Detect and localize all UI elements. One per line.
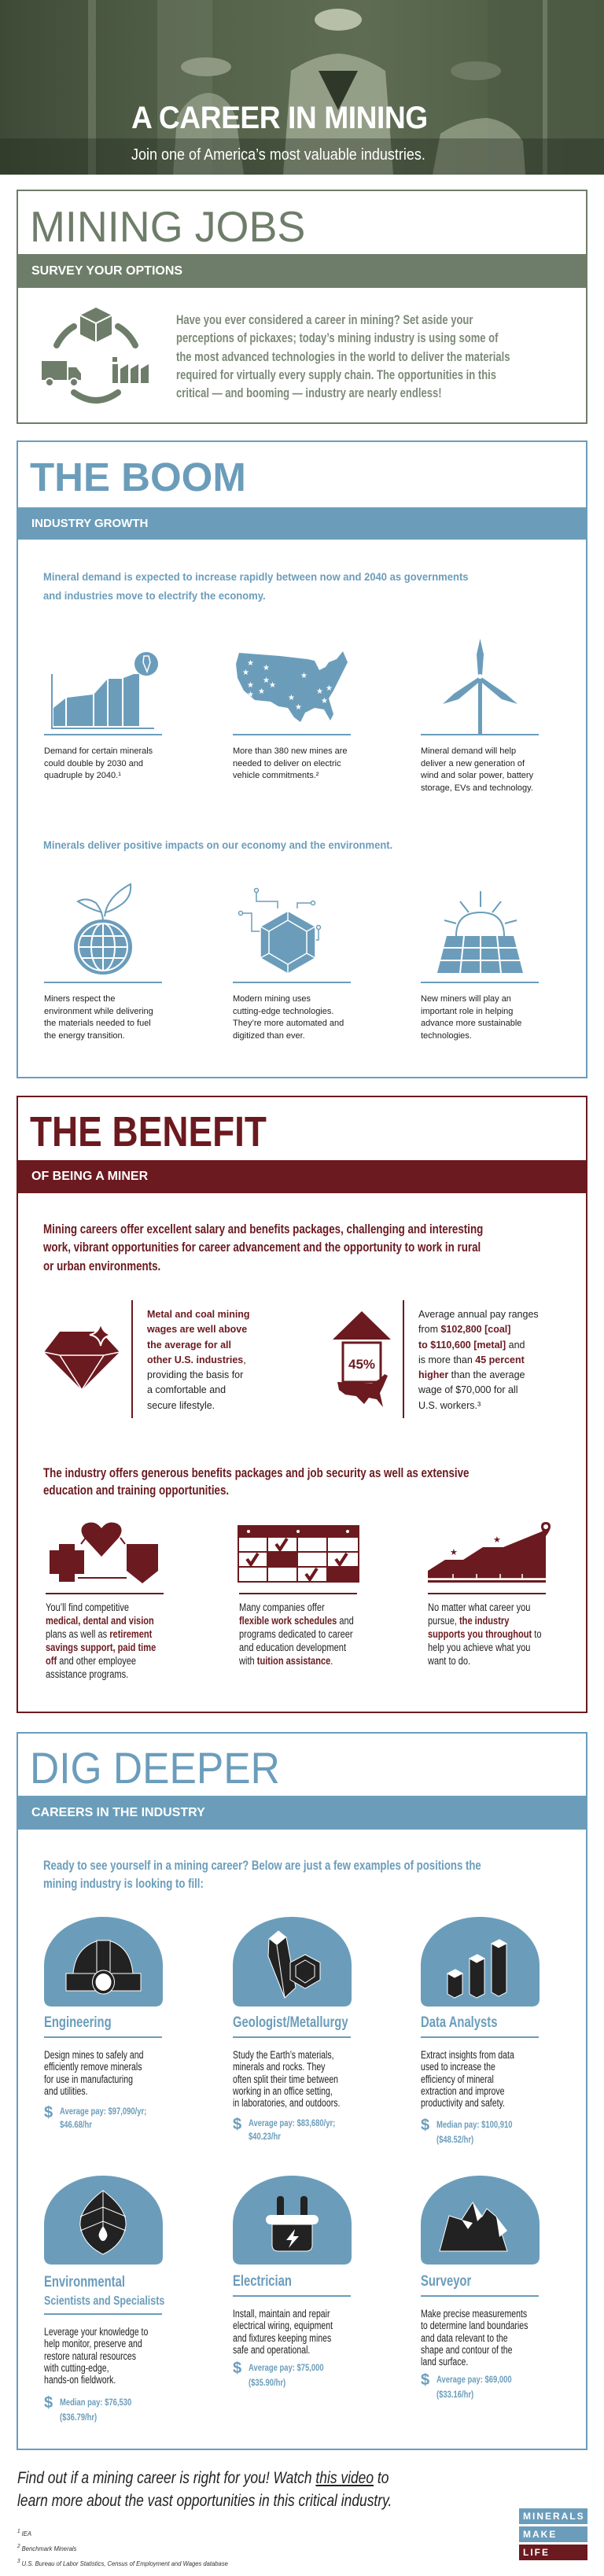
pay: engineering: $ xyxy=(44,2104,53,2121)
caption: support xyxy=(428,1601,542,1667)
bar: of being a miner xyxy=(17,1160,587,1193)
icon: US map with stars: ★ xyxy=(247,691,254,699)
text: boom headline 2: Minerals deliver positive impacts on our economy and the environment. xyxy=(43,838,392,851)
caption: environment: environment while delivering xyxy=(44,1007,153,1016)
caption: mines: needed to deliver on electric xyxy=(233,758,341,768)
text: engineering description: efficiently remove minerals xyxy=(44,2061,142,2073)
logo: minerals make life: MAKE xyxy=(523,2529,557,2540)
caption: demand: quadruple by 2040.¹ xyxy=(44,771,121,780)
pay: surveyor: $ xyxy=(421,2371,429,2389)
text: environmental description: hands-on fieldwork. xyxy=(44,2374,116,2386)
item: technology xyxy=(233,887,351,1040)
footnotes xyxy=(17,2525,228,2569)
text: benefit headline: work, vibrant opportunities for career advancement and the opportunity to work in rural xyxy=(43,1240,481,1255)
text: environmental description: help monitor, preserve and xyxy=(44,2338,142,2349)
bar: careers in the industry xyxy=(17,1796,587,1830)
text: electrician description: Install, maintain and repair xyxy=(233,2308,330,2320)
text: surveyor description: land surface. xyxy=(421,2356,468,2368)
caption: support: supports you throughout to xyxy=(428,1628,542,1640)
pay: data xyxy=(421,2117,547,2148)
text: engineering description xyxy=(44,2049,143,2097)
text: benefit headline 2: The industry offers generous benefits packages and job security as well as extensive xyxy=(43,1466,469,1480)
title: data analysts: Data Analysts xyxy=(421,2014,497,2031)
footnotes: 2 Benchmark Minerals xyxy=(17,2543,76,2552)
footnotes: 1 IEA xyxy=(17,2528,31,2537)
title: geologist: Geologist/Metallurgy xyxy=(233,2014,348,2031)
heading: the boom: THE BOOM xyxy=(30,455,246,499)
pay: environmental: $ xyxy=(44,2394,53,2412)
text: geologist description xyxy=(233,2049,340,2109)
text: pay range: higher than the average xyxy=(418,1369,525,1380)
text: data description: used to increase the xyxy=(421,2061,495,2073)
caption: health: medical, dental and vision xyxy=(46,1615,154,1627)
text: electrician description xyxy=(233,2308,333,2356)
text: wages xyxy=(147,1309,250,1411)
hero subtitle: Join one of America’s most valuable industries. xyxy=(131,146,425,164)
icon: US map with stars: ★ xyxy=(263,676,270,685)
caption: environment: Miners respect the xyxy=(44,994,115,1004)
caption: support: help you achieve what you xyxy=(428,1642,530,1653)
icon: solar panel with sun xyxy=(437,891,523,973)
panel: dig deeper xyxy=(17,1732,587,2450)
text: environmental description xyxy=(44,2326,148,2386)
caption: health xyxy=(46,1601,156,1680)
caption: demand: could double by 2030 and xyxy=(44,758,143,768)
pay: data: $ xyxy=(421,2117,429,2134)
text: surveyor description: shape and contour of the xyxy=(421,2344,513,2356)
text: pay range: to $110,600 [metal] and xyxy=(418,1340,525,1351)
divider: vertical line 1 xyxy=(131,1300,133,1418)
caption: technology: cutting-edge technologies. xyxy=(233,1007,333,1016)
icon: 3d bars xyxy=(421,1917,540,2007)
text: boom headline 1: Mineral demand is expected to increase rapidly between now and 2040 as governments xyxy=(43,570,469,583)
text: dig deeper headline: mining industry is looking to fill: xyxy=(43,1877,204,1891)
caption: solar: advance more sustainable xyxy=(421,1019,521,1028)
text: data description: efficiency of mineral xyxy=(421,2073,494,2085)
caption: solar xyxy=(421,994,521,1040)
bar: careers in the industry: CAREERS IN THE INDUSTRY xyxy=(31,1806,205,1819)
icon: arrow 45%: 45% xyxy=(348,1357,375,1372)
item: solar xyxy=(421,891,539,1040)
caption: schedules: programs dedicated to career xyxy=(239,1628,353,1640)
bar: industry growth xyxy=(17,507,587,540)
text: environmental description: Leverage your knowledge to xyxy=(44,2326,148,2338)
caption: wind: Mineral demand will help xyxy=(421,746,516,756)
item: globe xyxy=(44,883,162,1040)
text: dig deeper headline: Ready to see yourself in a mining career? Below are just a few examples of positions the xyxy=(43,1859,481,1873)
text: footer call to action: learn more about the vast opportunities in this critical industry. xyxy=(17,2492,392,2509)
pay: geologist: Average pay: $83,680/yr; xyxy=(249,2119,335,2128)
logo: minerals make life: LIFE xyxy=(523,2547,550,2558)
card: engineering xyxy=(44,1917,163,2130)
pay: geologist: $ xyxy=(233,2116,241,2133)
text: benefit headline: Mining careers offer excellent salary and benefits packages, challenging and interesting xyxy=(43,1222,483,1236)
pay: geologist xyxy=(233,2116,359,2147)
text: electrician description: safe and operational. xyxy=(233,2344,310,2356)
icon: rising mountain path xyxy=(428,1522,551,1583)
text: geologist description: working in an office setting, xyxy=(233,2085,333,2097)
text: wages: other U.S. industries, xyxy=(147,1354,246,1365)
pay: electrician xyxy=(233,2360,359,2391)
icon: arrow 45% xyxy=(333,1311,391,1407)
pay: electrician: ($35.90/hr) xyxy=(249,2379,285,2388)
text: mining jobs intro: perceptions of pickaxes; today’s mining industry is using some of xyxy=(176,331,498,345)
icon: heart cross shield xyxy=(50,1523,158,1583)
icon: US map with stars: ★ xyxy=(247,681,254,690)
item: flexible schedules xyxy=(238,1525,359,1667)
text: electrician description: and fixtures keeping mines xyxy=(233,2332,331,2344)
pay: data: ($48.52/hr) xyxy=(436,2136,473,2145)
pay: environmental: Median pay: $76,530 xyxy=(60,2398,131,2408)
pay: electrician: $ xyxy=(233,2360,241,2377)
card: environmental xyxy=(44,2176,174,2427)
text: mining jobs intro xyxy=(176,313,510,400)
caption: support: No matter what career you xyxy=(428,1601,530,1613)
icon: crystals xyxy=(233,1917,352,2007)
text: electrician description: electrical wiring, equipment xyxy=(233,2320,333,2331)
heading: dig deeper: DIG DEEPER xyxy=(30,1743,280,1793)
caption: environment: the energy transition. xyxy=(44,1030,125,1040)
footnotes: 3 U.S. Bureau of Labor Statistics, Census of Employment and Wages database xyxy=(17,2558,228,2567)
logo: minerals make life xyxy=(519,2508,587,2560)
icon: US map with stars: ★ xyxy=(326,684,333,693)
icon: calendar xyxy=(238,1525,359,1583)
text: pay range xyxy=(418,1309,539,1411)
heading: the benefit: THE BENEFIT xyxy=(30,1108,267,1155)
heading: mining jobs: MINING JOBS xyxy=(30,202,305,251)
icon: US map with stars: ★ xyxy=(269,681,276,690)
caption: technology: Modern mining uses xyxy=(233,994,311,1004)
caption: solar: important role in helping xyxy=(421,1007,513,1016)
title: environmental: Scientists and Specialists xyxy=(44,2294,164,2308)
text: wages: secure lifestyle. xyxy=(147,1400,215,1411)
text: benefit headline: or urban environments. xyxy=(43,1259,160,1273)
icon: hard hat xyxy=(44,1917,163,2007)
icon: US map with stars: ★ xyxy=(288,694,295,702)
icon: US map with stars: ★ xyxy=(242,669,249,677)
card: data analysts xyxy=(421,1917,547,2145)
caption: wind: storage, EVs and technology. xyxy=(421,783,533,793)
panel: the boom xyxy=(17,440,587,1078)
text: wages: Metal and coal mining xyxy=(147,1309,250,1320)
text: mining jobs intro: critical — and booming — industry are nearly endless! xyxy=(176,386,442,400)
hero title: A CAREER IN MINING xyxy=(131,101,428,135)
caption: schedules: with tuition assistance. xyxy=(239,1655,333,1667)
text: geologist description: often split their time between xyxy=(233,2073,338,2085)
pay: data: Median pay: $100,910 xyxy=(436,2121,512,2130)
text: pay range: is more than 45 percent xyxy=(418,1354,525,1365)
pay: electrician: Average pay: $75,000 xyxy=(249,2364,324,2373)
text: surveyor description: and data relevant to the xyxy=(421,2332,508,2344)
text: data description: productivity and safety. xyxy=(421,2097,505,2109)
text: wages: the average for all xyxy=(147,1340,231,1351)
text: engineering description: for use in manufacturing xyxy=(44,2073,133,2085)
caption: health: assistance programs. xyxy=(46,1668,128,1680)
text: surveyor description: Make precise measurements xyxy=(421,2308,527,2320)
icon: wind turbine xyxy=(443,639,517,734)
pay: engineering: $46.68/hr xyxy=(60,2121,92,2130)
text: mining jobs intro: the most advanced technologies in the world to deliver the materials xyxy=(176,350,510,364)
icon: US map with stars: ★ xyxy=(300,672,308,680)
bar: survey your options: SURVEY YOUR OPTIONS xyxy=(31,264,182,278)
icon: leaf drop xyxy=(44,2176,163,2265)
caption: mines xyxy=(233,746,348,780)
caption: support: want to do. xyxy=(428,1655,470,1667)
caption: mines: vehicle commitments.² xyxy=(233,771,319,780)
bar: survey your options xyxy=(17,254,587,288)
subtitle band xyxy=(0,138,604,175)
bar: of being a miner: OF BEING A MINER xyxy=(31,1170,148,1183)
text: wages: a comfortable and xyxy=(147,1384,226,1395)
caption: demand xyxy=(44,746,153,780)
text: dig deeper headline xyxy=(43,1859,481,1891)
card: geologist xyxy=(233,1917,359,2145)
text: pay range: from $102,800 [coal] xyxy=(418,1324,510,1335)
text: wages: providing the basis for xyxy=(147,1369,243,1380)
hero photo: workers silhouettes xyxy=(88,0,547,175)
caption: health: off and other employee xyxy=(46,1655,136,1667)
caption: demand: Demand for certain minerals xyxy=(44,746,153,756)
caption: wind: deliver a new generation of xyxy=(421,758,525,768)
bar: industry growth: INDUSTRY GROWTH xyxy=(31,517,148,530)
text: geologist description: Study the Earth’s materials, xyxy=(233,2049,334,2061)
pay: surveyor xyxy=(421,2371,547,2403)
icon: supply chain cycle xyxy=(42,308,149,404)
text: boom headline 1 xyxy=(43,570,469,602)
icon: rising mountain path: ★ xyxy=(450,1547,458,1557)
caption: health: savings support, paid time xyxy=(46,1642,156,1653)
text: engineering description: Design mines to safely and xyxy=(44,2049,143,2061)
icon: gem xyxy=(44,1326,120,1389)
panel: the benefit xyxy=(17,1096,587,1713)
pay: environmental xyxy=(44,2394,170,2426)
title: engineering: Engineering xyxy=(44,2014,112,2031)
caption: solar: New miners will play an xyxy=(421,994,511,1004)
card: surveyor xyxy=(421,2176,547,2404)
caption: wind xyxy=(421,746,533,793)
icon: hexagon circuit xyxy=(238,887,321,973)
caption: solar: technologies. xyxy=(421,1030,472,1040)
icon: US map with stars: ★ xyxy=(321,697,328,706)
text: footer call to action xyxy=(17,2467,392,2512)
caption: technology xyxy=(233,994,344,1040)
caption: schedules: flexible work schedules and xyxy=(239,1615,354,1627)
icon: mountains xyxy=(421,2176,540,2265)
text: pay range: wage of $70,000 for all xyxy=(418,1384,517,1395)
pay: environmental: ($36.79/hr) xyxy=(60,2413,97,2423)
icon: US map with stars: ★ xyxy=(263,664,270,673)
text: geologist description: in laboratories, and outdoors. xyxy=(233,2097,340,2109)
caption: environment xyxy=(44,994,153,1040)
item: career support xyxy=(428,1522,551,1667)
text: pay range: Average annual pay ranges xyxy=(418,1309,539,1320)
logo: minerals make life: MINERALS xyxy=(523,2511,585,2522)
item: wind turbine xyxy=(421,639,539,793)
item: demand chart xyxy=(44,652,162,780)
icon: bar chart xyxy=(51,652,158,729)
icon: US map with stars: ★ xyxy=(247,659,254,668)
text: environmental description: restore natural resources xyxy=(44,2350,136,2362)
pay: surveyor: ($33.16/hr) xyxy=(436,2390,473,2400)
text: geologist description: minerals and rocks. They xyxy=(233,2061,325,2073)
panel: mining jobs xyxy=(17,190,587,424)
title: environmental xyxy=(44,2273,164,2310)
caption: support: pursue, the industry xyxy=(428,1615,509,1627)
icon: rising mountain path: ★ xyxy=(493,1535,501,1545)
text: pay range: U.S. workers.³ xyxy=(418,1400,481,1411)
caption: schedules: Many companies offer xyxy=(239,1601,325,1613)
text: mining jobs intro: required for virtually every supply chain. The opportunities in this xyxy=(176,368,496,382)
title: surveyor: Surveyor xyxy=(421,2273,471,2290)
text: benefit headline xyxy=(43,1222,483,1273)
item: US mines map xyxy=(233,651,351,780)
title: electrician: Electrician xyxy=(233,2273,292,2290)
icon: US map with stars: ★ xyxy=(295,703,302,712)
text: data description: extraction and improve xyxy=(421,2085,505,2097)
caption: wind: wind and solar power, battery xyxy=(421,771,533,780)
text: boom headline 1: and industries move to electrify the economy. xyxy=(43,588,266,601)
caption: technology: They’re more automated and xyxy=(233,1019,344,1028)
text: surveyor description xyxy=(421,2308,528,2368)
card: electrician xyxy=(233,2176,359,2388)
caption: technology: digitized than ever. xyxy=(233,1030,305,1040)
icon: US map with stars: ★ xyxy=(316,687,323,696)
divider: vertical line 2 xyxy=(403,1300,404,1418)
text: data description xyxy=(421,2049,514,2109)
caption: mines: More than 380 new mines are xyxy=(233,746,348,756)
text: footer call to action: Find out if a mining career is right for you! Watch this video to xyxy=(17,2469,389,2487)
icon: US map with stars: ★ xyxy=(258,687,265,696)
pay: surveyor: Average pay: $69,000 xyxy=(436,2375,512,2385)
text: benefit headline 2: education and training opportunities. xyxy=(43,1483,229,1498)
caption: schedules: and education development xyxy=(239,1642,346,1653)
icon: globe with leaves xyxy=(74,883,132,975)
caption: schedules xyxy=(239,1601,354,1667)
text: engineering description: and utilities. xyxy=(44,2085,88,2097)
caption: health: plans as well as retirement xyxy=(46,1628,152,1640)
hero banner xyxy=(0,0,604,175)
text: mining jobs intro: Have you ever considered a career in mining? Set aside your xyxy=(176,313,473,327)
icon: US map with stars xyxy=(236,651,348,722)
pay: engineering: Average pay: $97,090/yr; xyxy=(60,2107,146,2117)
text: data description: Extract insights from data xyxy=(421,2049,514,2061)
item: health benefits xyxy=(46,1523,164,1680)
text: surveyor description: to determine land boundaries xyxy=(421,2320,528,2331)
icon: plug xyxy=(233,2176,352,2265)
caption: environment: the materials needed to fuel xyxy=(44,1019,151,1028)
text: wages: wages are well above xyxy=(147,1324,247,1335)
text: benefit headline 2 xyxy=(43,1466,469,1498)
title: environmental: Environmental xyxy=(44,2274,125,2290)
pay: engineering xyxy=(44,2104,170,2136)
caption: health: You’ll find competitive xyxy=(46,1601,129,1613)
pay: geologist: $40.23/hr xyxy=(249,2132,281,2142)
text: environmental description: with cutting-edge, xyxy=(44,2362,109,2374)
